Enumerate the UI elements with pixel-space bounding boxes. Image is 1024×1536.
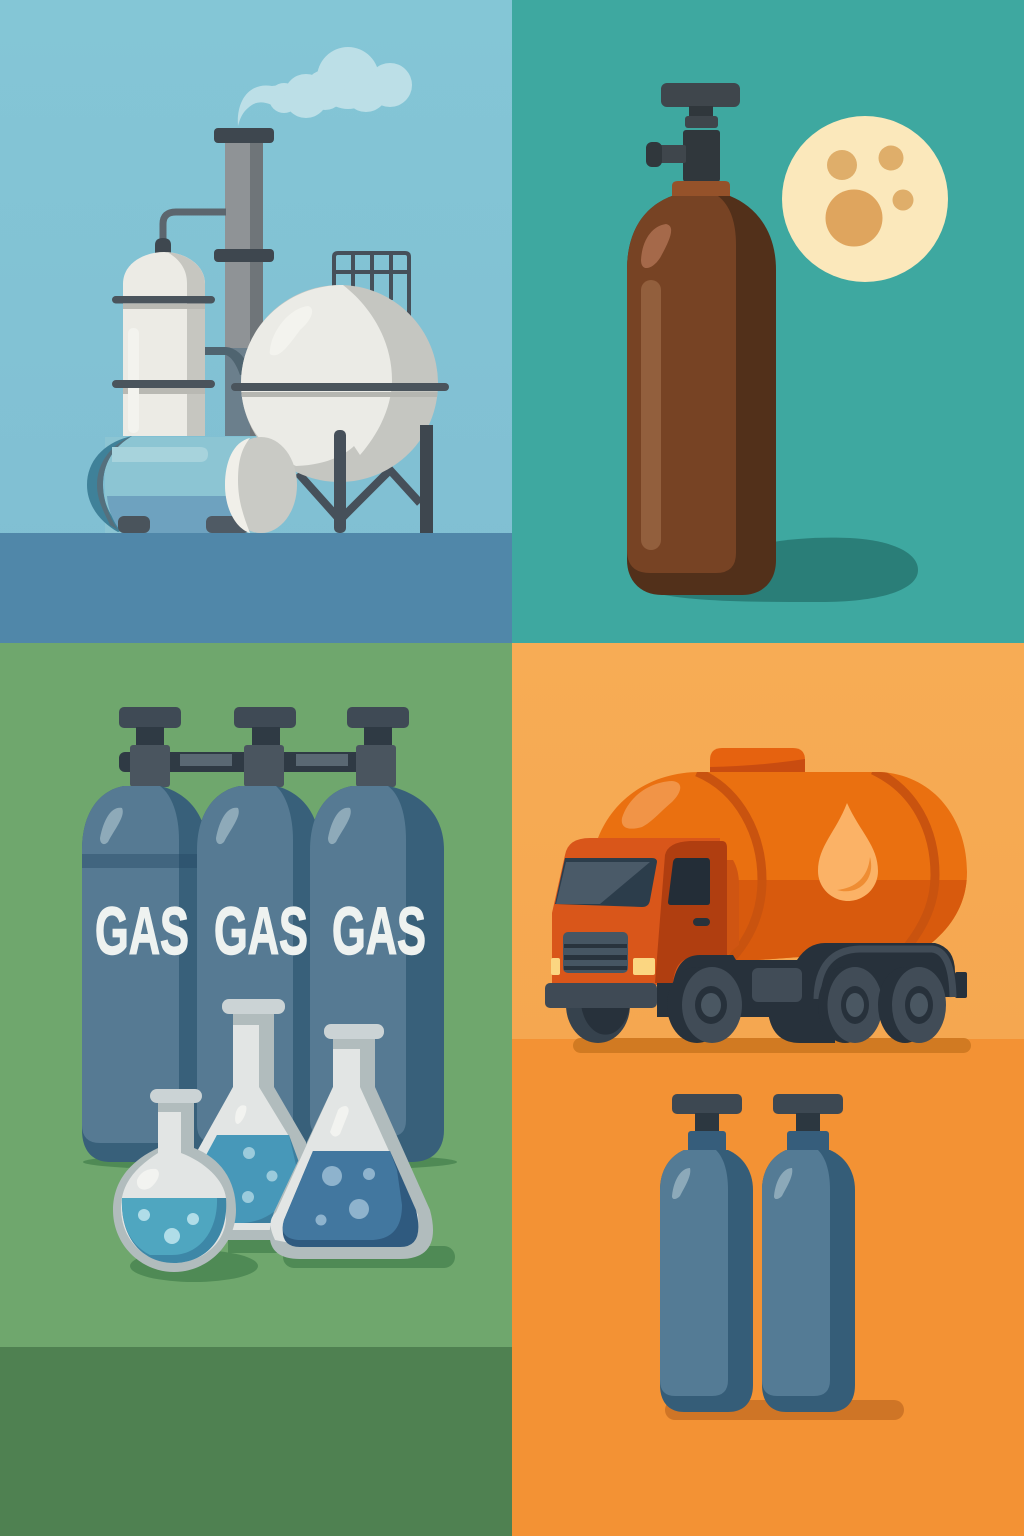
- icon: tanker truck: [545, 748, 970, 1043]
- icon: white distillation column: [112, 252, 215, 436]
- label: GAS: GAS: [214, 894, 308, 969]
- panel: tanker and cylinders: [512, 643, 1024, 1536]
- icon: cylinders shadow: [665, 1400, 904, 1420]
- icon: chassis: [657, 943, 955, 1017]
- icon: bacteria circle: [782, 116, 948, 282]
- icon: front bumper: [545, 983, 657, 1008]
- icon: rear wheels: [768, 967, 946, 1043]
- icon: cylinder shadow: [650, 538, 918, 602]
- icon: gas cylinder left: [82, 786, 207, 1162]
- icon: valves and manifold: [119, 707, 409, 787]
- label: GAS: GAS: [95, 894, 189, 969]
- icon: round flask: [113, 1089, 236, 1272]
- icon: spherical storage tank: [231, 285, 449, 533]
- icon: fuel drop: [818, 803, 878, 901]
- icon: grid railing: [334, 253, 409, 320]
- icon: truck cab: [727, 860, 739, 955]
- icon: truck shadow: [573, 1038, 971, 1053]
- icon: brown gas cylinder: [627, 83, 776, 595]
- icon: large conical flask: [270, 1024, 433, 1259]
- icon: chimney stack: [214, 128, 274, 436]
- icon: right blue cylinder: [762, 1094, 855, 1412]
- icon: smoke cloud: [238, 47, 412, 126]
- icon: left blue cylinder: [660, 1094, 753, 1412]
- icon: front wheel: [566, 967, 742, 1043]
- panel: refinery: [0, 0, 512, 643]
- icon: middle conical flask: [190, 999, 306, 1240]
- panel: brown cylinder: [512, 0, 1024, 643]
- icon: ground shadows: [83, 1153, 457, 1282]
- icon: connecting pipes: [163, 212, 226, 246]
- icon: gas cylinder middle: [197, 786, 320, 1162]
- icon: gas cylinder right: [310, 786, 444, 1162]
- label: GAS: [95, 894, 426, 969]
- icon: horizontal glass tank: [87, 436, 297, 533]
- panel: lab gas cylinders and flasks: [0, 643, 512, 1536]
- label: GAS: GAS: [332, 894, 426, 969]
